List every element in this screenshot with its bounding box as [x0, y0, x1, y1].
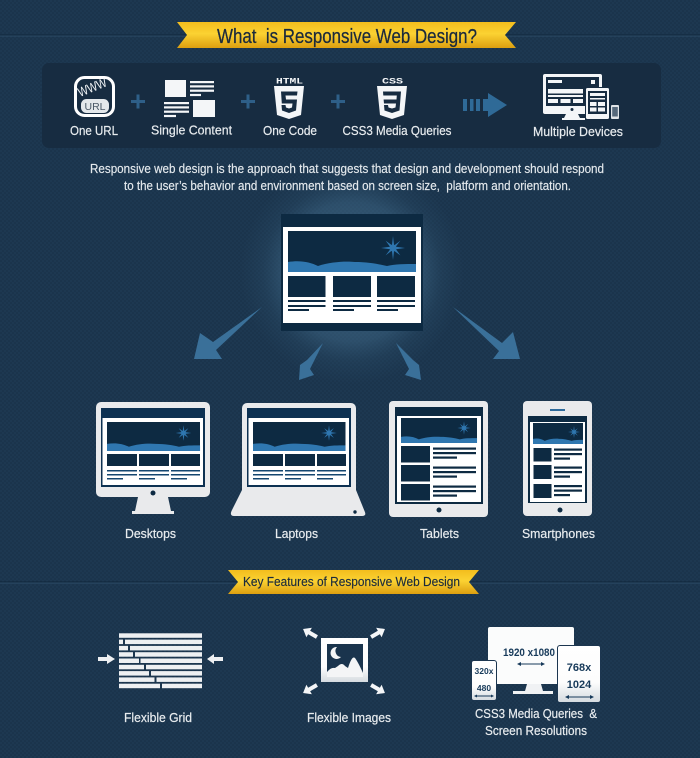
icon: screen resolutions: 480 — [477, 683, 491, 693]
arrow: to smartphones — [453, 307, 520, 359]
label: Tablets: Tablets — [420, 526, 459, 541]
icon: CSS3 shield: CSS — [382, 78, 403, 86]
icon: one URL — [76, 74, 114, 116]
label: CSS3 Media Queries and Screen Resolutions: Screen Resolutions — [485, 723, 587, 738]
label: CSS3 Media Queries and Screen Resolutions — [475, 706, 597, 738]
icon: flexible images — [300, 624, 388, 698]
icon: screen resolutions: 1920 x1080 — [503, 647, 555, 659]
arrow: to tablets — [396, 343, 421, 380]
banner: key features — [228, 570, 479, 594]
label: CSS3 Media Queries and Screen Resolutions: CSS3 Media Queries & — [475, 706, 597, 721]
icon: screen resolutions — [471, 627, 601, 703]
plus sign — [331, 94, 345, 108]
label: Single Content: Single Content — [151, 122, 232, 138]
intro paragraph — [90, 162, 604, 193]
icon: single content — [164, 80, 215, 117]
plus sign — [241, 94, 255, 108]
icon: screen resolutions: 1024 — [567, 679, 592, 691]
label: One URL: One URL — [70, 123, 118, 138]
plus sign — [131, 94, 145, 108]
device: tablet — [389, 401, 488, 517]
icon: screen resolutions: 320x — [475, 666, 494, 676]
icon: HTML5 shield: HTML — [276, 78, 303, 86]
label: Desktops: Desktops — [125, 526, 176, 541]
arrow: to laptops — [299, 343, 323, 380]
device: laptop — [231, 403, 365, 516]
intro paragraph: Responsive web design is the approach that suggests that design and development should respond — [90, 162, 604, 176]
banner: key features: Key Features of Responsive Web Design — [243, 574, 460, 589]
panel: responsive formula — [42, 63, 661, 148]
icon: screen resolutions: 768x — [567, 662, 592, 674]
device: desktop — [96, 402, 210, 514]
label: CSS3 Media Queries: CSS3 Media Queries — [342, 123, 452, 138]
arrow: results in — [463, 93, 507, 117]
icon: HTML5 shield — [274, 78, 304, 119]
icon: one URL: WWW — [76, 74, 109, 100]
main web page layout — [281, 214, 423, 331]
label: Flexible Images: Flexible Images — [307, 710, 391, 725]
intro paragraph: to the user’s behavior and environment based on screen size, platform and orientation. — [124, 179, 571, 193]
title banner: What is Responsive Web Design? — [217, 26, 477, 48]
label: Smartphones: Smartphones — [522, 526, 595, 541]
icon: one URL: URL — [84, 101, 106, 113]
device: smartphone — [523, 401, 592, 516]
label: One Code: One Code — [263, 123, 317, 138]
label: Flexible Grid: Flexible Grid — [124, 710, 192, 725]
icon: multiple devices — [543, 74, 619, 120]
label: Laptops: Laptops — [275, 526, 318, 541]
icon: CSS3 shield — [377, 78, 407, 119]
icon: flexible grid — [98, 633, 223, 688]
arrow: to desktops — [194, 307, 262, 359]
label: Multiple Devices: Multiple Devices — [533, 124, 623, 139]
